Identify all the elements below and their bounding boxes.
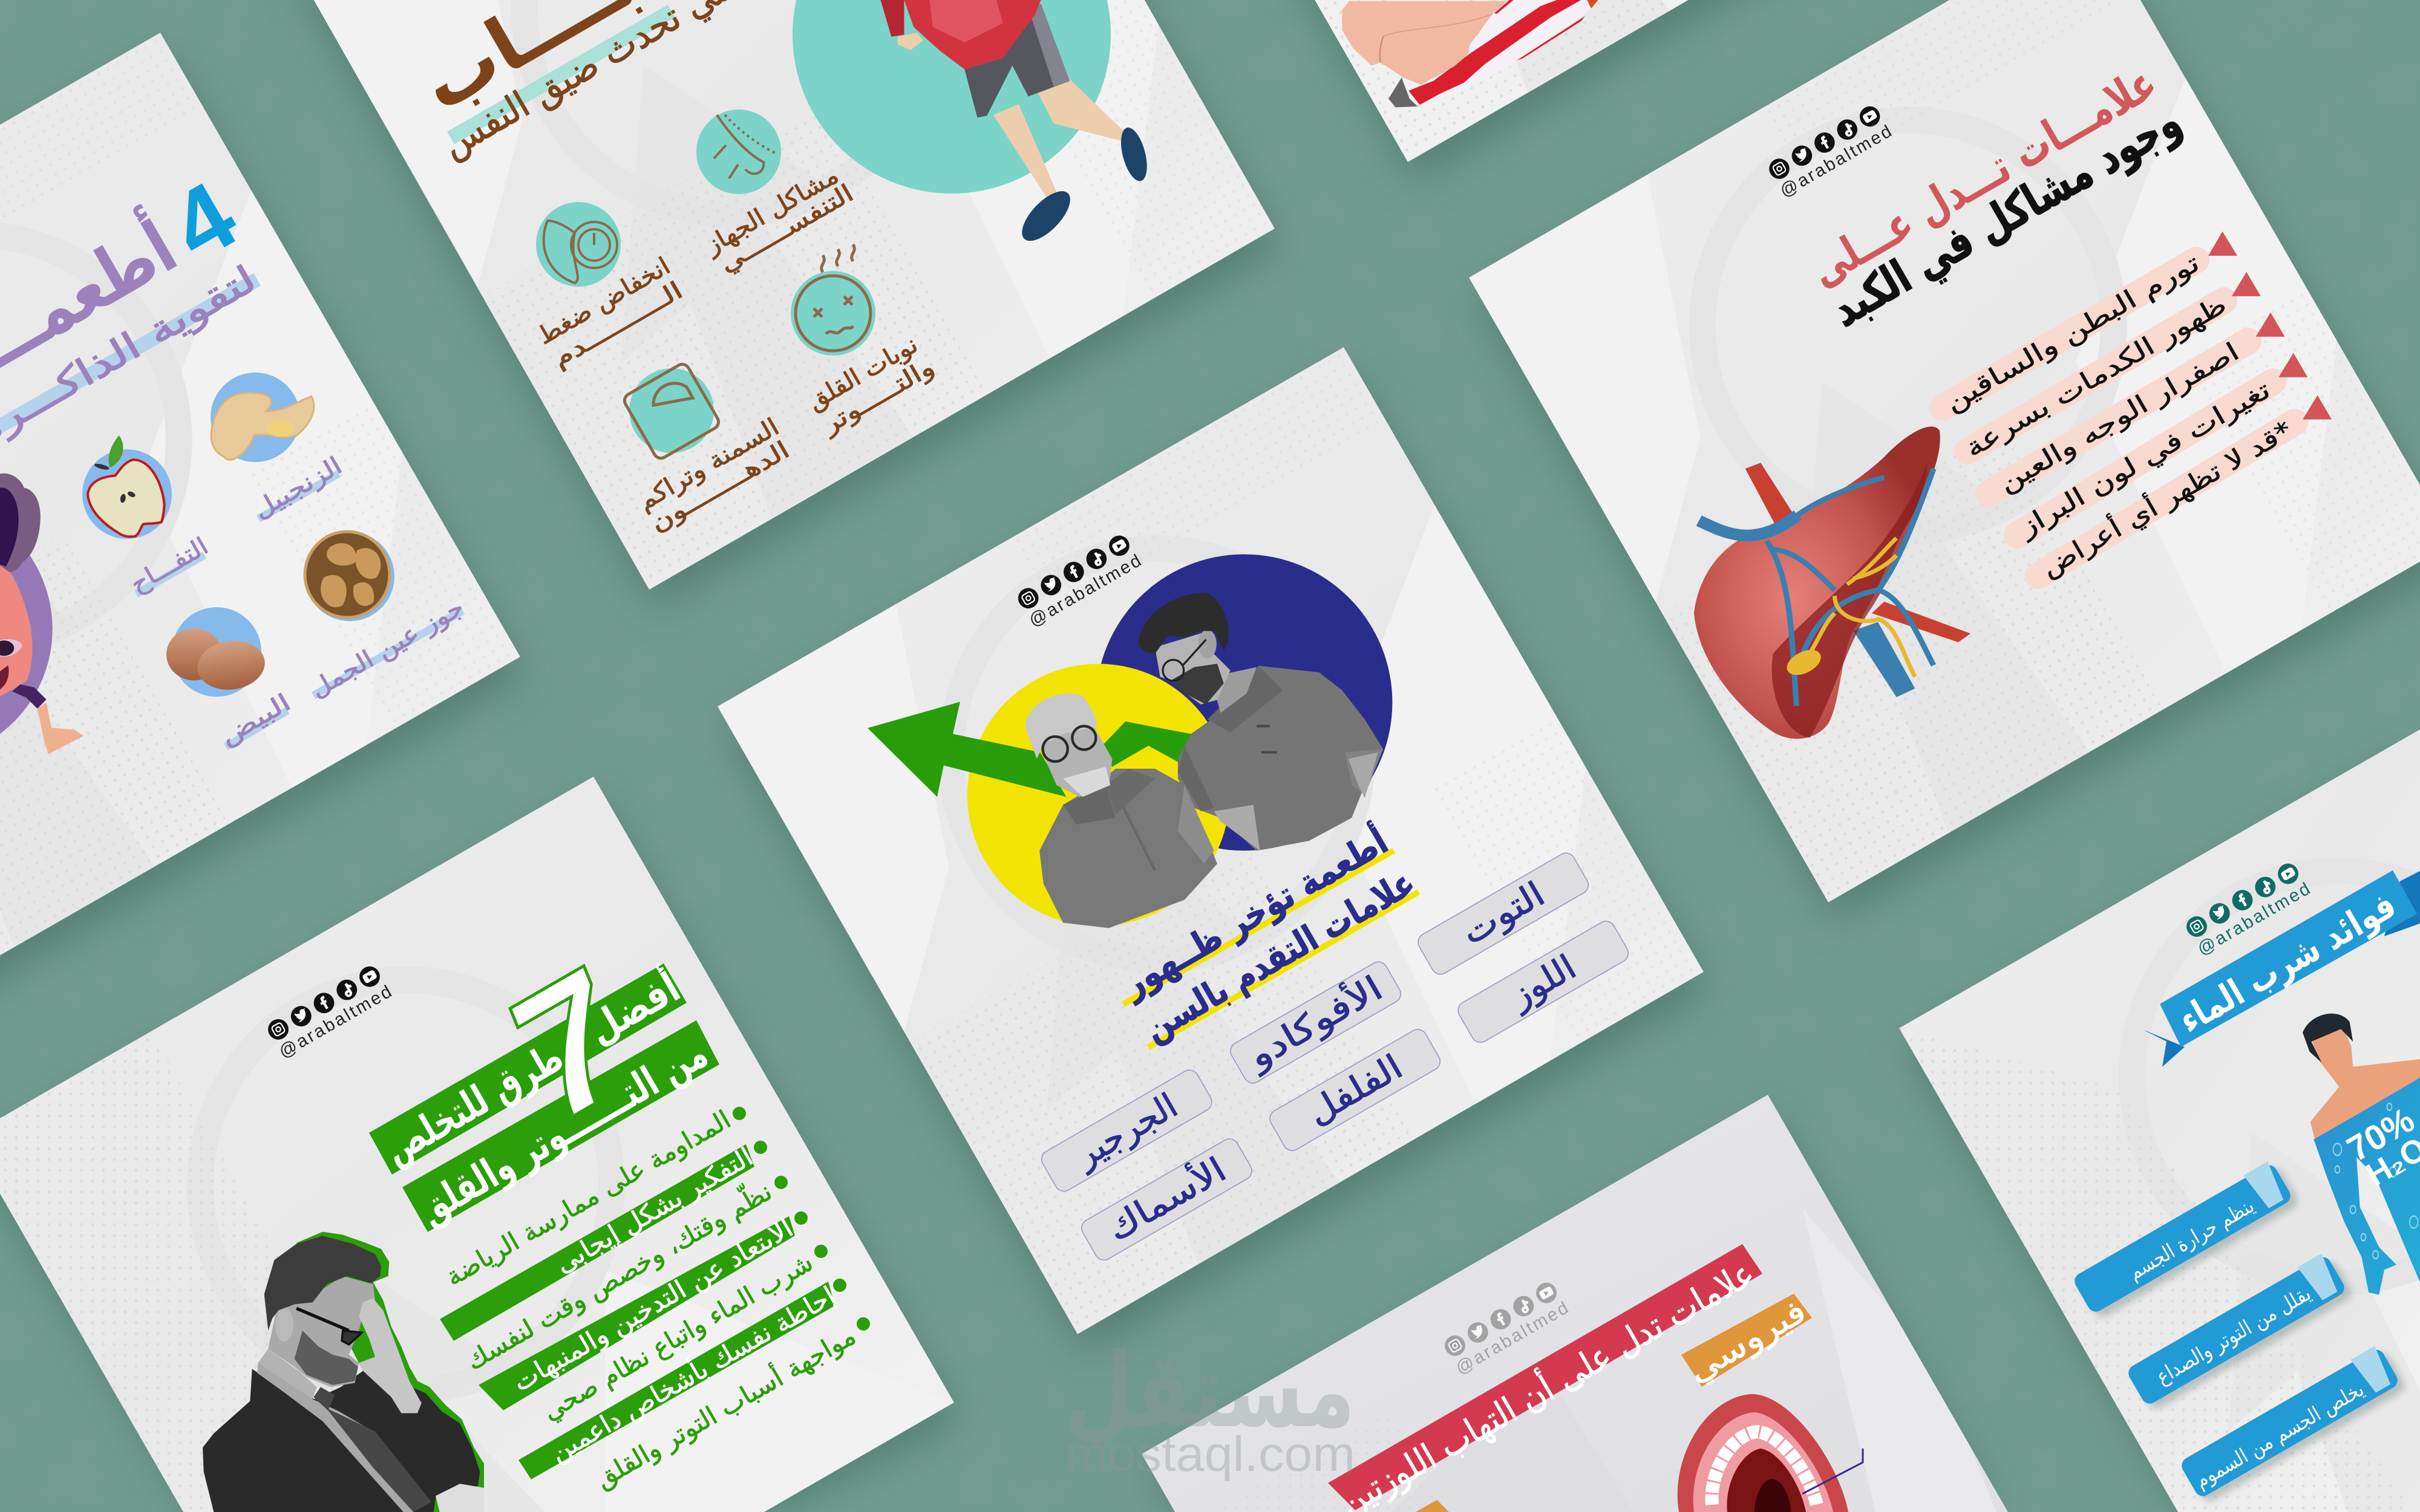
heading text (376, 960, 716, 1233)
photo: young man (1139, 593, 1383, 851)
watermark (1065, 1331, 1355, 1482)
photo: stressed man (203, 1232, 484, 1512)
heading: علامـــات تـــدل عـــلى (1800, 55, 2166, 297)
labels: الدهــــــــون (646, 436, 794, 538)
second orange tag (1416, 1500, 1449, 1512)
panel: breath shortness causes (top left) (291, 0, 1278, 590)
illustration: water body (2303, 1014, 2420, 1295)
heading text: من التـــــــوتر والقلق (411, 1030, 716, 1233)
list bullets (733, 1107, 870, 1331)
70% label: 70% (2340, 1100, 2420, 1169)
food button: pepper: الفلفل (1301, 1048, 1410, 1133)
benefit text 3: يخلص الجسم من السموم (2191, 1377, 2368, 1493)
annotation line (1802, 1448, 1863, 1494)
list highlight bars (1943, 260, 2295, 576)
green arrow (868, 702, 1191, 797)
list text: شرب الماء واتباع نظام صحي (537, 1247, 818, 1427)
list text: نظّم وقتك، وخصص وقت لنفسك (459, 1173, 777, 1377)
panel: memory foods (left) (0, 32, 521, 1018)
panel: anti-aging foods (centre) (718, 347, 1704, 1334)
food button: arugula (1038, 1067, 1215, 1194)
labels: مشاكل الجهاز (699, 161, 843, 260)
digit 4: 4 (153, 160, 253, 281)
list text: التفكير بشكل إيجابي (550, 1142, 758, 1279)
illustration: running person (880, 0, 1151, 245)
tag text: فيروسي (1681, 1292, 1813, 1390)
photo: older man (1025, 694, 1217, 928)
labels (532, 161, 939, 538)
item label highlights (136, 474, 463, 747)
icon: blood pressure gauge (536, 202, 621, 287)
labels: السمنة وتراكم (633, 413, 784, 516)
illustration: liver (1694, 426, 1970, 739)
icon: dizzy face (791, 244, 875, 356)
list text: تغيرات في لون البراز (2013, 374, 2275, 544)
icon: ginger (211, 373, 314, 462)
food button: berries: التوت (1455, 875, 1551, 953)
panel: tonsillitis signs (bottom) (1142, 1095, 2008, 1512)
list text: المداومة على ممارسة الرياضة (440, 1104, 736, 1292)
benefit button 2 (2124, 1250, 2354, 1413)
benefit text 1: ينظم حرارة الجسم (2124, 1193, 2258, 1285)
benefit button 1 (2070, 1158, 2300, 1321)
labels: التنفســــــي (715, 179, 858, 278)
title: أطعمة تؤخر ظــهور (1113, 818, 1395, 1006)
title: علامات التقدم بالسن (1137, 862, 1422, 1050)
item labels: البيض (215, 688, 295, 751)
food button: almonds: اللوز (1502, 948, 1583, 1017)
food button: avocado: الأفوكادو (1239, 967, 1389, 1078)
food button: fish (1078, 1136, 1255, 1263)
food button: berries (1415, 850, 1592, 977)
red heading band (1328, 1244, 1762, 1510)
social handle: @arabaltmed (1025, 550, 1146, 631)
list text: مواجهة أسباب التوتر والقلق (589, 1319, 861, 1494)
icon: apple (82, 435, 172, 539)
list text: الابتعاد عن التدخين والمنبهات (508, 1213, 798, 1398)
panel: stress relief tips (bottom left) (0, 777, 954, 1512)
background shapes (1210, 1210, 1996, 1512)
heading bands (369, 963, 719, 1232)
panel: water benefits (right) (1899, 729, 2420, 1512)
social handle: @arabaltmed (1452, 1297, 1574, 1378)
food button: almonds (1455, 918, 1632, 1046)
illustration: brain character (0, 474, 83, 760)
social handle: @arabaltmed (2194, 878, 2315, 959)
food button: avocado (1227, 959, 1404, 1086)
title underlines (1123, 851, 1419, 1048)
subheading: وجود مشاكل في الكبد (1822, 94, 2191, 337)
yellow circle (967, 664, 1230, 926)
list text: اصفرار الوجه والعين (1993, 336, 2244, 498)
heading text: أفضل (578, 960, 688, 1054)
icon: eggs (166, 607, 268, 697)
food button: pepper (1266, 1026, 1444, 1154)
social handle: @arabaltmed (275, 980, 397, 1062)
item labels: جوز عين الجمل (306, 593, 469, 703)
item labels: التفـــاح (126, 532, 213, 599)
blue circle (1096, 554, 1392, 851)
panel: liver warning signs (top right) (1469, 0, 2420, 904)
social handle: @arabaltmed (1777, 121, 1897, 201)
item labels: الزنجبيل (249, 452, 347, 524)
icon: weight scale (622, 362, 721, 461)
subtitle highlight (451, 11, 672, 138)
item labels (126, 452, 469, 751)
food button: fish: الأسماك (1100, 1149, 1233, 1249)
big number 7: 7 (488, 925, 653, 1165)
list text (1940, 248, 2297, 584)
teal circle (793, 0, 1111, 194)
benefit button 3 (2177, 1342, 2407, 1506)
list triangles (2208, 232, 2332, 420)
subheading highlight (0, 279, 257, 429)
ribbon (2142, 870, 2420, 1067)
icon: walnut (305, 532, 394, 621)
illustration: legs with striped shorts (1342, 0, 1600, 107)
icon: nose (696, 109, 781, 194)
list highlight bands (440, 1144, 835, 1479)
background shapes (1899, 871, 2420, 1512)
list text: ظهور الكدمات بسرعة (1960, 289, 2232, 464)
watermark: mostaql.com (1065, 1427, 1355, 1482)
labels: الــــــــــدم (548, 276, 687, 373)
watermark: مستقل (1065, 1331, 1355, 1451)
list text (440, 1104, 861, 1494)
labels: انخفاض ضغط (532, 252, 675, 350)
orange tag (1681, 1294, 1812, 1387)
background shapes (0, 980, 954, 1512)
panel: striped shorts post (top) (1315, 0, 1688, 162)
heading text: طرق للتخلص (376, 1034, 572, 1174)
benefit text 2: يقلل من التوتر والصداع (2152, 1282, 2315, 1389)
list text: *قد لا تظهر أي أعراض (2035, 414, 2297, 584)
food button: arugula: الجرجير (1068, 1086, 1184, 1176)
labels: والتـــــوتر (817, 353, 939, 440)
list text: تورم البطن والساقين (1940, 248, 2205, 417)
labels: نوبات القلق (803, 331, 923, 415)
illustration: open mouth (1678, 1394, 1848, 1512)
list text: إحاطة نفسك بأشخاص داعمين (544, 1278, 840, 1468)
